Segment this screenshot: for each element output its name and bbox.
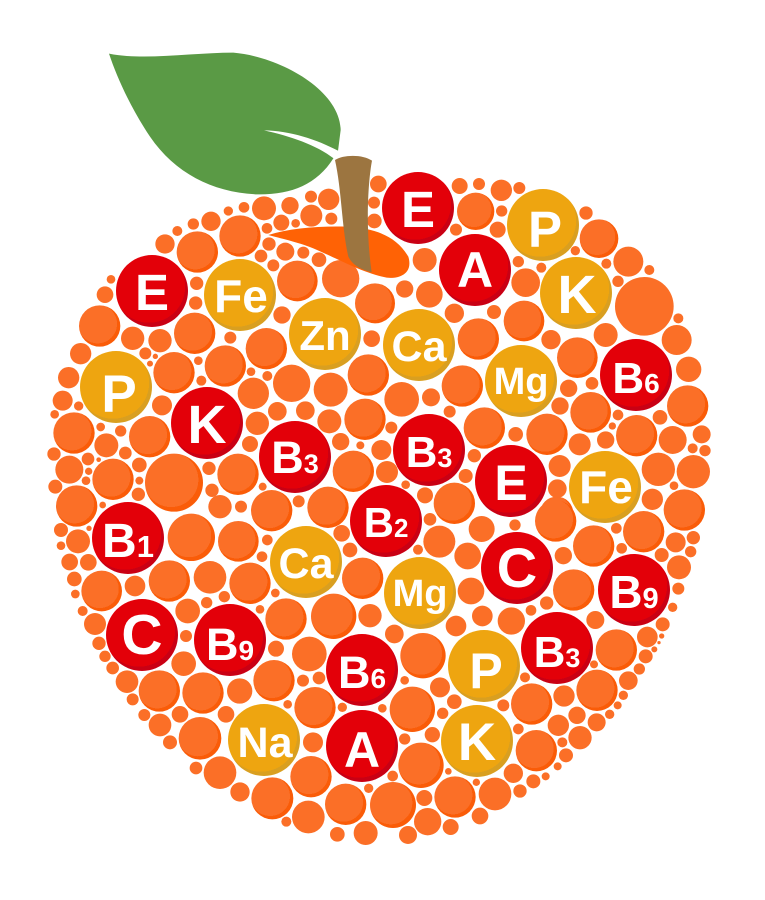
badge: B3: B3 bbox=[406, 428, 452, 477]
badge: C: C bbox=[497, 536, 537, 599]
badge: P: P bbox=[528, 201, 562, 258]
badge: P bbox=[448, 630, 520, 702]
badge: B2: B2 bbox=[364, 499, 408, 546]
badge: A: A bbox=[457, 242, 493, 298]
badge: B1: B1 bbox=[102, 515, 154, 568]
badge: Mg: Mg bbox=[494, 361, 548, 403]
badge: Fe: Fe bbox=[579, 461, 633, 513]
icon: leaf bbox=[109, 53, 341, 194]
badge: Ca: Ca bbox=[392, 323, 448, 371]
badge: A bbox=[439, 234, 511, 306]
badge: C bbox=[106, 599, 178, 671]
fruit dots: upper right bbox=[370, 176, 711, 531]
badge: K: K bbox=[558, 265, 596, 325]
badge: B3 bbox=[521, 612, 593, 684]
badge: B3 bbox=[259, 421, 331, 493]
badge: P bbox=[80, 351, 152, 424]
badge: E: E bbox=[401, 181, 435, 238]
badge: P bbox=[507, 189, 579, 261]
badge: E bbox=[382, 172, 454, 244]
badge: C bbox=[481, 532, 553, 604]
badge: Fe: Fe bbox=[214, 270, 268, 322]
badge: Mg: Mg bbox=[393, 573, 447, 615]
badge: K bbox=[441, 705, 513, 777]
badge: Mg bbox=[485, 345, 557, 417]
badge: B3: B3 bbox=[271, 432, 319, 483]
badge: B6 bbox=[600, 339, 672, 411]
icon: stem bbox=[335, 156, 372, 272]
fruit dots: lower left bbox=[54, 514, 383, 845]
badge: C: C bbox=[121, 603, 163, 667]
badge: B3: B3 bbox=[534, 628, 580, 677]
badge: Zn bbox=[289, 298, 361, 370]
badge: Na: Na bbox=[238, 719, 294, 767]
badge: B9: B9 bbox=[609, 566, 659, 618]
badge: P: P bbox=[469, 643, 503, 699]
badge: E: E bbox=[494, 455, 528, 511]
badge: K: K bbox=[188, 395, 226, 455]
badge: K bbox=[171, 387, 243, 459]
calyx: orange hollow at stem bbox=[268, 227, 409, 278]
badge: E: E bbox=[135, 264, 169, 321]
badge: Fe bbox=[569, 451, 641, 523]
badge: P: P bbox=[101, 365, 137, 424]
badge: K: K bbox=[458, 713, 496, 772]
badge: B9 bbox=[194, 604, 266, 676]
badge: B9 bbox=[598, 554, 670, 626]
badge: Ca bbox=[270, 526, 342, 598]
fruit dots: upper left bbox=[47, 189, 395, 531]
badge: B1 bbox=[92, 502, 164, 574]
fruit dots: lower right bbox=[370, 500, 700, 844]
badge: A bbox=[326, 710, 398, 782]
badge: K bbox=[540, 257, 612, 329]
badge: Ca: Ca bbox=[279, 540, 335, 588]
badge: B6: B6 bbox=[338, 647, 386, 698]
badge: Fe bbox=[204, 259, 276, 331]
badge: B6 bbox=[326, 634, 398, 706]
badge: B6: B6 bbox=[612, 354, 660, 403]
badge: A: A bbox=[344, 722, 380, 778]
badge: B2 bbox=[350, 485, 422, 557]
badge: E bbox=[116, 255, 188, 327]
badge: Na bbox=[228, 704, 300, 776]
apple made of dots bbox=[47, 176, 711, 845]
badge: Mg bbox=[384, 557, 456, 629]
badge: B3 bbox=[393, 414, 465, 486]
badge: B9: B9 bbox=[206, 619, 254, 670]
badge: Ca bbox=[383, 309, 455, 381]
badges: vitamins and minerals bbox=[80, 172, 672, 782]
badge: E bbox=[475, 445, 547, 517]
badge: Zn: Zn bbox=[299, 312, 351, 359]
